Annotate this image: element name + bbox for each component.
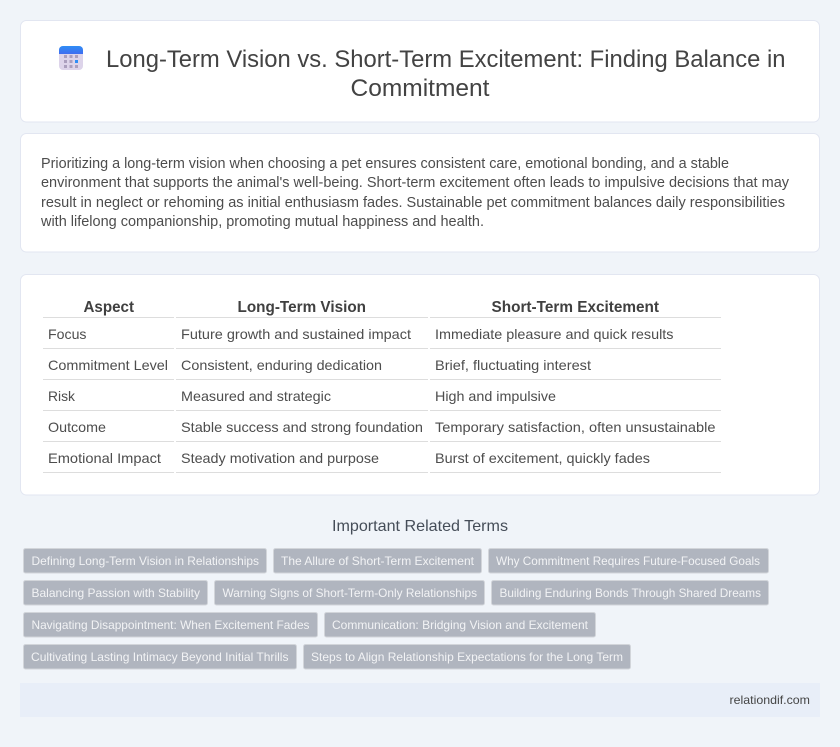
table row: outcome: Temporary satisfaction, often unsustainable	[435, 419, 716, 435]
table row: commitment level	[48, 357, 591, 373]
table header row: Long-Term Vision	[238, 299, 366, 316]
chip	[24, 612, 318, 637]
chip: Why Commitment Requires Future-Focused Goals	[496, 554, 760, 568]
table row: focus: Immediate pleasure and quick results	[435, 326, 674, 342]
table header row	[84, 299, 660, 316]
table row: commitment level: Commitment Level	[48, 357, 168, 373]
footer source text: relationdif.com	[730, 693, 810, 707]
chip: Navigating Disappointment: When Excitement Fades	[32, 618, 310, 632]
title: Commitment	[350, 75, 490, 102]
panel: title card	[20, 20, 820, 122]
table row: outcome: Outcome	[48, 419, 106, 435]
chip: Steps to Align Relationship Expectations for the Long Term	[311, 650, 623, 664]
chip	[488, 548, 768, 573]
heading: important related terms: Important Related Terms	[332, 518, 508, 535]
table header row: Short-Term Excitement	[492, 299, 660, 316]
table row: focus: Future growth and sustained impact	[181, 326, 411, 342]
chip: Building Enduring Bonds Through Shared Dreams	[500, 586, 761, 600]
table row: emotional impact: Burst of excitement, quickly fades	[435, 450, 650, 466]
table row: risk: High and impulsive	[435, 388, 556, 404]
panel: comparison table card	[20, 274, 820, 495]
table row: outcome	[48, 419, 716, 435]
table row: commitment level: Brief, fluctuating interest	[435, 357, 591, 373]
text block: summary paragraph	[40, 156, 790, 230]
table row: commitment level: Consistent, enduring dedication	[181, 357, 382, 373]
comparison table	[43, 299, 721, 473]
chip: Defining Long-Term Vision in Relationships	[32, 554, 259, 568]
title	[106, 46, 786, 102]
chip	[304, 644, 630, 669]
table row: focus	[48, 326, 674, 342]
table row: emotional impact: Emotional Impact	[48, 450, 161, 466]
footer bar	[20, 683, 820, 717]
chip: Balancing Passion with Stability	[32, 586, 200, 600]
chip: The Allure of Short-Term Excitement	[281, 554, 475, 568]
table row: risk: Risk	[48, 388, 76, 404]
chip: Cultivating Lasting Intimacy Beyond Initial Thrills	[31, 650, 288, 664]
table header row: Aspect	[84, 299, 135, 316]
chip	[24, 548, 266, 573]
table row: outcome: Stable success and strong foundation	[181, 419, 423, 435]
table row: emotional impact	[48, 450, 650, 466]
text block: summary paragraph: result in neglect or rehoming as initial enthusiasm fades. Sustainable pet commitment balances daily responsibilities	[41, 195, 785, 211]
table row: focus: Focus	[48, 326, 86, 342]
chip	[24, 580, 208, 605]
panel: summary card	[20, 134, 820, 252]
table row: emotional impact: Steady motivation and purpose	[181, 450, 379, 466]
title: Long-Term Vision vs. Short-Term Excitement: Finding Balance in	[106, 46, 786, 73]
table row: risk	[48, 388, 556, 404]
chip: Warning Signs of Short-Term-Only Relationships	[222, 586, 477, 600]
text block: summary paragraph: Prioritizing a long-term vision when choosing a pet ensures consistent care, emotional bonding, and a stable	[41, 156, 729, 172]
chip	[492, 580, 768, 605]
chip	[214, 580, 484, 605]
chip	[274, 548, 482, 573]
chip	[324, 612, 596, 637]
table row: risk: Measured and strategic	[181, 388, 331, 404]
icon: calendar	[59, 46, 83, 70]
chip	[24, 644, 296, 669]
chip: Communication: Bridging Vision and Excitement	[332, 618, 589, 632]
text block: summary paragraph: environment that supports the animal's well-being. Short-term excitement often leads to impulsive decisions that may	[41, 175, 790, 191]
text block: summary paragraph: with lifelong companionship, promoting mutual happiness and health.	[40, 214, 484, 230]
related terms chips	[24, 548, 768, 669]
